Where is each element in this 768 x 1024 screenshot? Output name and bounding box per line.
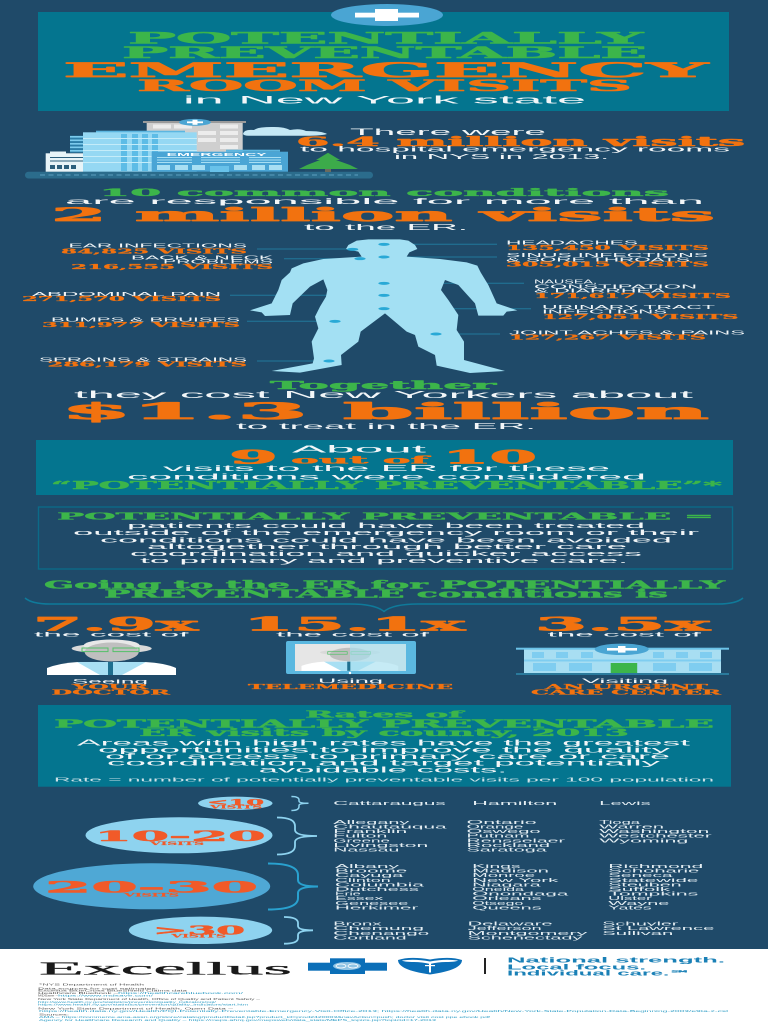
county list: over 30: Schuyler — [602, 922, 679, 928]
labels: conditions on left side: PROBLEMS — [163, 260, 274, 266]
county list: 20 to 30: Richmond — [608, 864, 703, 870]
county list: under 10: Lewis — [599, 801, 651, 807]
county list: 10 to 20: Putnam — [467, 834, 530, 840]
labels: conditions on left side: 216,555 VISITS — [71, 263, 273, 271]
labels: conditions on right side: NAUSEA, — [534, 280, 598, 286]
comparison: your doctor — [33, 615, 202, 696]
text block: sources and footnotes: Healthcare Bluebook – — [38, 991, 119, 995]
text block: 10 common conditions: to the ER. — [304, 222, 468, 232]
heading: title lines: in New York state — [183, 94, 586, 106]
illustration: human body with markers — [250, 239, 517, 373]
county list: 20 to 30: Seneca — [608, 873, 676, 879]
text block: $1.3 billion cost: they cost New Yorkers about — [74, 390, 694, 401]
text block: sources and footnotes: https://healthcarebluebook.com/ — [118, 991, 244, 995]
panel: potentially preventable definition: conditions could have been avoided — [100, 535, 672, 544]
county list: over 30: Montgomery — [468, 931, 588, 937]
county list: 10 to 20: Fulton — [333, 834, 387, 840]
logo: Excellus wordmark: Excellus — [39, 958, 293, 978]
panel: rates by county intro: Areas with high rates have the greatest — [77, 739, 693, 748]
county list: over 30: Chenango — [333, 931, 429, 937]
county list: 20 to 30: Cayuga — [335, 873, 406, 879]
labels: conditions on right side: 135,450 VISITS — [506, 244, 709, 252]
county list: 10 to 20: Warren — [599, 825, 664, 831]
panel: potentially preventable definition: to primary and preventive care. — [140, 556, 628, 565]
comparison: urgent care center: 3.5x — [535, 615, 714, 636]
comparison: your doctor: DOCTOR — [52, 689, 173, 696]
county list: 20 to 30: Wayne — [608, 901, 669, 907]
text block: sources and footnotes: AMA – https://commerce.ama-assn.org/store/catalog/productDetail.jsp?product_id=prod2420003&navAction=push; doctor visit cost ppe ebook pdf — [39, 1015, 490, 1019]
county list: 20 to 30: Yates — [608, 905, 652, 911]
labels: conditions on right side: & DIARRHEA — [534, 289, 667, 295]
heading: title lines: POTENTIALLY — [128, 28, 647, 48]
labels: conditions on right side: SINUS INFECTIONS — [506, 253, 710, 259]
tagline: Individual care.℠ — [507, 969, 692, 977]
heading: title lines: EMERGENCY — [63, 58, 711, 82]
comparison: telemedicine: 15.1x — [243, 615, 469, 636]
county list: 10 to 20: Chautauqua — [333, 825, 450, 831]
county list: over 30: Sullivan — [602, 931, 673, 937]
county list: 20 to 30: Ulster — [608, 896, 652, 902]
panel: potentially preventable definition — [38, 507, 732, 569]
tagline — [507, 958, 725, 977]
county list: over 30: Bronx — [333, 922, 382, 928]
panel: rates by county intro: coordination and target potentially — [107, 759, 664, 768]
county list: 10 to 20: Orange — [467, 825, 523, 831]
panel: rates by county intro: of or access to primary care or care — [105, 752, 672, 761]
county list: over 30: Delaware — [468, 922, 553, 928]
heading: going to the ER — [44, 578, 725, 600]
labels: conditions on left side: ABDOMINAL PAIN — [32, 292, 221, 298]
county list: 20 to 30: Erie — [335, 892, 361, 898]
county list: 20 to 30: Queens — [472, 905, 542, 911]
county list: 20 to 30: Onondaga — [472, 892, 572, 898]
labels: conditions on right side: 127,051 VISITS — [542, 313, 739, 321]
county list: 10 to 20: Washington — [599, 829, 709, 835]
text block: sources and footnotes: New York State Department of Health, Open Data – — [38, 1006, 234, 1010]
tagline: National strength. — [507, 958, 725, 965]
county list: 10 to 20: Franklin — [333, 829, 407, 835]
county list: 20 to 30: Columbia — [335, 882, 427, 888]
text block: sources and footnotes: Data sources for cost estimates: — [38, 986, 159, 990]
text block: 10 common conditions: 2 million visits — [51, 205, 715, 226]
county list: 20 to 30: Otsego — [472, 901, 523, 907]
panel: rates by county intro: Rates of — [305, 710, 467, 720]
panel: 9 out of 10: 10 — [442, 446, 537, 468]
tier: 10 to 20 visits: VISITS — [147, 842, 204, 847]
text block: sources and footnotes: http://www.health.ny.gov/statistics/prevention/quality_indicators/pqi/ — [38, 1000, 216, 1004]
text block: sources and footnotes: Agency for Healthcare Research and Quality – https://meps.ahrq.gov/mepsweb/data_stats/MEPS_topics.jsp?topicid=17-2013 — [39, 1018, 437, 1022]
county list: 20 to 30: Kings — [472, 864, 521, 870]
county list: 20 to 30: Dutchess — [335, 887, 420, 893]
comparison: your doctor: Seeing — [72, 679, 148, 685]
panel: 9 out of 10: out of — [291, 454, 434, 466]
text block: sources and footnotes: https://www.health.ny.gov/statistics/prevention/quality_indicators/start.htm — [38, 1002, 249, 1006]
panel: rates by county intro — [38, 705, 731, 787]
heading: title lines: ROOM VISITS — [137, 76, 632, 95]
county list: 20 to 30: Essex — [335, 896, 384, 902]
text block: sources and footnotes: https://health.data.ny.gov/Health/PQI-Potentially-Preventable-Emergency-Visit-Office-2013; https://health.data.ny.gov/Health/New-York-State-Population-Data-Beginning-2003/e9ta-z-csl — [39, 1009, 729, 1013]
county list: over 30: Cortland — [333, 935, 407, 941]
panel: 9 out of 10 — [36, 440, 733, 495]
tier: over 30 visits: VISITS — [168, 935, 226, 940]
labels: conditions on right side: CONSTIPATION — [534, 284, 697, 290]
county list: 10 to 20: Westchester — [599, 834, 712, 840]
tier: under 10 visits: VISITS — [207, 805, 262, 810]
text block: 6.4 million visits — [296, 127, 745, 161]
county list: 20 to 30: Statewide — [608, 878, 698, 884]
comparison: urgent care center: CARE CENTER — [531, 689, 724, 696]
county list: under 10: Cattaraugus — [333, 801, 446, 807]
county list: 20 to 30: Clinton — [335, 878, 391, 884]
text block: 10 common conditions: 10 common conditions — [99, 187, 669, 199]
text block: 10 common conditions — [51, 187, 715, 232]
leader lines: conditions to body — [230, 244, 531, 361]
divider — [484, 958, 486, 974]
labels: conditions on right side: URINARY TRACT — [542, 305, 718, 311]
county list: 10 to 20: Ontario — [467, 820, 537, 826]
panel: footer — [0, 949, 768, 1024]
text block: sources and footnotes: *NYS Department of Health — [39, 982, 145, 986]
comparison: your doctor: the cost of — [34, 632, 189, 639]
labels: conditions on right side: INFECTIONS — [542, 309, 669, 315]
county list: 20 to 30: Orleans — [472, 896, 542, 902]
comparison: urgent care center: Visiting — [582, 679, 668, 685]
labels: conditions on right side: 171,617 VISITS — [534, 292, 731, 300]
county list: 10 to 20: Wyoming — [599, 838, 688, 844]
panel: potentially preventable definition: POTENTIALLY PREVENTABLE = — [57, 511, 714, 522]
comparison: your doctor: YOUR — [68, 684, 151, 691]
county list: over 30: Schenectady — [468, 935, 583, 941]
comparison: urgent care center: AN URGENT — [541, 684, 709, 691]
text block: sources and footnotes: https://www.mdsave.com/ — [58, 994, 154, 998]
labels: conditions on left side: SPRAINS & STRAINS — [39, 358, 249, 364]
labels: conditions on right side — [506, 240, 747, 342]
tier: 20 to 30 visits: VISITS — [121, 893, 179, 898]
illustration: hospital buildings — [25, 119, 373, 178]
labels: conditions on right side: & SORE THROATS — [506, 258, 692, 264]
labels: conditions on right side: 305,015 VISITS — [506, 261, 709, 269]
county list: 20 to 30: Broome — [335, 869, 407, 875]
panel: 9 out of 10: visits to the ER for these — [163, 464, 612, 473]
labels: conditions on left side — [22, 244, 275, 369]
text block: sources and footnotes: MDSave – — [38, 994, 59, 998]
labels: conditions on left side: 286,179 VISITS — [48, 361, 247, 369]
panel: potentially preventable definition: patients could have been treated — [127, 521, 645, 530]
county list: 10 to 20: Rensselaer — [467, 838, 565, 844]
text block: 6.4 million visits: to hospital emergency rooms — [300, 144, 732, 154]
text block: 6.4 million visits: in NYS in 2013. — [394, 152, 609, 161]
text block: 6.4 million visits: 6.4 million visits — [296, 135, 745, 150]
panel: rates by county intro: Rate = number of potentially preventable visits per 100 population — [54, 777, 714, 783]
panel: 9 out of 10: conditions were considered — [127, 472, 648, 481]
county list: 20 to 30: Schoharie — [608, 869, 699, 875]
text block: sources and footnotes: Excellus BlueCross BlueShield Claims data — [38, 989, 188, 993]
comparison: your doctor: 7.9x — [33, 615, 202, 636]
county list: 20 to 30: Oneida — [472, 887, 527, 893]
heading: title lines: PREVENTABLE — [122, 43, 648, 62]
text block: $1.3 billion cost — [61, 379, 709, 431]
icon: urgent care building — [516, 644, 729, 675]
panel: 9 out of 10: “POTENTIALLY PREVENTABLE”* — [51, 479, 723, 492]
county list: 20 to 30: Monroe — [472, 873, 535, 879]
county list: 20 to 30: Suffolk — [608, 887, 671, 893]
heading: going to the ER: PREVENTABLE conditions is — [104, 587, 668, 600]
tagline: Local focus. — [507, 964, 646, 971]
labels: conditions on left side: BACK & NECK — [131, 255, 275, 261]
county list: over 30: St Lawrence — [602, 926, 714, 932]
county list: 20 to 30: Madison — [472, 869, 549, 875]
icon: tablet with doctor — [286, 641, 416, 674]
county list: 20 to 30: Niagara — [472, 882, 544, 888]
panel: potentially preventable definition: coordination and quicker access — [130, 549, 643, 558]
text block: $1.3 billion cost: $1.3 billion — [61, 399, 709, 425]
text block: 6.4 million visits: There were — [350, 127, 546, 138]
panel: rates by county intro: opportunities to improve the quality — [98, 745, 674, 754]
county list: over 30: Chemung — [333, 926, 424, 932]
icon: doctor — [47, 640, 176, 675]
panel: rates by county intro: POTENTIALLY PREVENTABLE — [54, 718, 714, 731]
illustration: hospital buildings: EMERGENCY — [167, 152, 267, 157]
text block: sources and footnotes: Sources: — [39, 1012, 69, 1016]
labels: conditions on left side: 84,825 VISITS — [61, 248, 247, 256]
labels: conditions on right side: JOINT ACHES & PAINS — [509, 330, 747, 336]
comparison: telemedicine: TELEMEDICINE — [248, 684, 454, 691]
county list: 20 to 30 — [335, 864, 703, 911]
comparison: telemedicine: Using — [318, 679, 383, 685]
county list: 10 to 20: Greene — [333, 838, 390, 844]
county list: 10 to 20 — [333, 820, 712, 853]
comparison: urgent care center — [516, 615, 729, 696]
county list: 20 to 30: Genesee — [335, 901, 408, 907]
labels: conditions on left side: EAR INFECTIONS — [68, 244, 249, 250]
tier: 20 to 30 visits — [33, 863, 703, 911]
comparison: telemedicine — [243, 615, 469, 691]
county list: 20 to 30: Tompkins — [608, 892, 699, 898]
tier: over 30 visits: >30 — [153, 923, 245, 937]
panel: potentially preventable definition: altogether through better care — [147, 542, 627, 551]
tier: over 30 visits — [129, 917, 714, 944]
tier: under 10 visits: <10 — [207, 797, 265, 807]
brace: comparison bracket — [25, 598, 743, 612]
comparison: urgent care center: the cost of — [548, 632, 702, 639]
county list: 20 to 30: Steuben — [608, 882, 682, 888]
logo: blue cross — [308, 958, 387, 974]
county list: 10 to 20: Allegany — [333, 820, 410, 826]
county list: 10 to 20: Oswego — [467, 829, 541, 835]
text block: $1.3 billion cost: Together — [270, 379, 497, 392]
comparison: telemedicine: the cost of — [276, 632, 430, 639]
tier: 20 to 30 visits: 20-30 — [45, 878, 258, 897]
county list: 10 to 20: Livingston — [333, 843, 428, 849]
county list: 10 to 20: Tioga — [599, 820, 643, 826]
panel: 9 out of 10: About — [292, 443, 426, 455]
labels: conditions on left side: 271,570 VISITS — [22, 295, 221, 303]
heading: going to the ER: Going to the ER for POTENTIALLY — [44, 578, 725, 591]
county list: 10 to 20: Rockland — [467, 843, 550, 849]
panel: rates by county intro: avoidable costs. — [259, 765, 507, 774]
county list: 10 to 20: Saratoga — [467, 847, 550, 853]
county list: 10 to 20: Nassau — [333, 847, 399, 853]
county list: 20 to 30: Herkimer — [335, 905, 419, 911]
tier: 10 to 20 visits: 10-20 — [94, 829, 266, 845]
panel: potentially preventable definition: outside of the emergency room or their — [73, 528, 702, 537]
panel: 9 out of 10: 9 — [229, 446, 278, 468]
text block: sources and footnotes: New York State Department of Health, Office of Quality and Patient Safety – — [38, 997, 261, 1001]
text block: 10 common conditions: are responsible for more than — [65, 196, 705, 206]
icon: medical cross badge — [331, 4, 443, 26]
heading: title lines — [63, 28, 711, 106]
labels: conditions on right side: HEADACHES — [506, 240, 640, 246]
logo: blue shield — [398, 958, 462, 974]
tier: 10 to 20 visits — [86, 817, 712, 854]
labels: conditions on left side: 311,977 VISITS — [42, 321, 240, 329]
labels: conditions on left side: BUMPS & BRUISES — [51, 318, 242, 324]
county list: over 30: Jefferson — [468, 926, 542, 932]
panel: rates by county intro: ER visits by county, 2013 — [139, 728, 629, 739]
county list: 20 to 30: Albany — [335, 864, 400, 870]
county list: under 10: Hamilton — [472, 801, 557, 807]
county list: under 10 — [333, 801, 651, 807]
county list: 20 to 30: New York — [472, 878, 559, 884]
text block: sources and footnotes — [38, 982, 729, 1022]
county list: over 30 — [333, 922, 714, 941]
panel: title — [38, 4, 729, 111]
labels: conditions on right side: 127,267 VISITS — [509, 334, 706, 342]
tier: under 10 visits — [198, 796, 651, 810]
text block: $1.3 billion cost: to treat in the ER. — [236, 421, 536, 431]
